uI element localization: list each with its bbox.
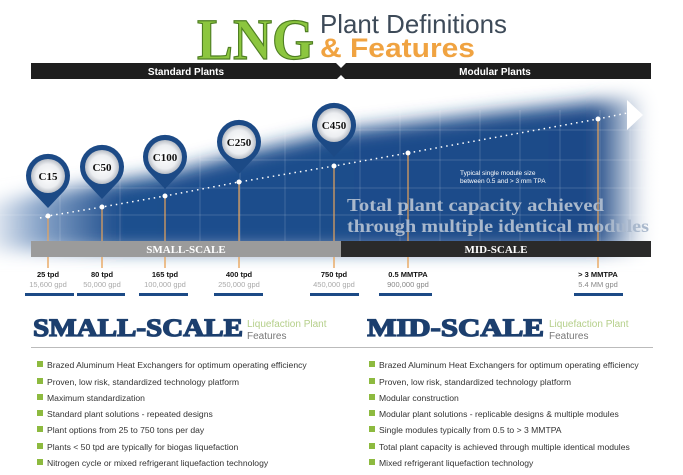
capacity labels: 450,000 gpd xyxy=(313,280,355,289)
heading: mid-scale: Liquefaction Plant xyxy=(549,319,629,330)
list: mid-scale features: Modular plant solutions - replicable designs & multiple modules xyxy=(379,409,619,419)
list: small-scale features: Brazed Aluminum Heat Exchangers for optimum operating efficiency xyxy=(47,360,307,370)
black header bar: Modular Plants xyxy=(459,67,531,78)
capacity labels: 0.5 MMTPA xyxy=(388,270,428,279)
infographic graphic xyxy=(0,7,651,296)
list: mid-scale features: Mixed refrigerant liquefaction technology xyxy=(379,458,533,468)
capacity labels: > 3 MMTPA xyxy=(578,270,618,279)
pins: C250 xyxy=(227,137,252,149)
scale bars: MID-SCALE xyxy=(465,244,527,256)
capacity labels xyxy=(29,270,618,289)
list: mid-scale features: Proven, low risk, standardized technology platform xyxy=(379,377,571,387)
heading: mid-scale: MID-SCALE xyxy=(367,315,544,342)
pins: C15 xyxy=(39,171,58,183)
list: mid-scale features: Total plant capacity is achieved through multiple identical modules xyxy=(379,442,630,452)
heading: mid-scale: Features xyxy=(549,331,588,342)
infographic graphic: Total plant capacity achieved xyxy=(347,195,604,215)
heading: small-scale: Liquefaction Plant xyxy=(247,319,327,330)
capacity labels: 50,000 gpd xyxy=(83,280,121,289)
dotted trend line xyxy=(40,113,627,218)
infographic graphic: through multiple identical modules xyxy=(347,216,649,236)
list: mid-scale features xyxy=(369,360,639,468)
pins: C450 xyxy=(322,120,347,132)
list: small-scale features: Nitrogen cycle or mixed refrigerant liquefaction technology xyxy=(47,458,268,468)
capacity labels: 25 tpd xyxy=(37,270,59,279)
list: mid-scale features: Modular construction xyxy=(379,393,459,403)
list: mid-scale features: Single modules typically from 0.5 to > 3 MMTPA xyxy=(379,425,562,435)
list: small-scale features: Plant options from 25 to 750 tons per day xyxy=(47,425,204,435)
title: LNG: LNG xyxy=(197,7,314,72)
list: small-scale features: Plants < 50 tpd are typically for biogas liquefaction xyxy=(47,442,238,452)
capacity labels: 15,600 gpd xyxy=(29,280,67,289)
pins: C50 xyxy=(93,162,112,174)
black header bar xyxy=(31,63,651,79)
list: mid-scale features: Brazed Aluminum Heat Exchangers for optimum operating efficiency xyxy=(379,360,639,370)
heading: small-scale: Features xyxy=(247,331,286,342)
scale bars xyxy=(31,241,651,257)
capacity labels: 100,000 gpd xyxy=(144,280,186,289)
black header bar: Standard Plants xyxy=(148,67,224,78)
capacity labels: 400 tpd xyxy=(226,270,253,279)
heading: mid-scale xyxy=(367,315,629,342)
blue capacity area xyxy=(0,97,665,250)
pins xyxy=(26,103,356,208)
infographic graphic: between 0.5 and > 3 mm TPA xyxy=(460,178,546,185)
capacity labels: 80 tpd xyxy=(91,270,113,279)
capacity labels: 165 tpd xyxy=(152,270,179,279)
module text: Typical single module size xyxy=(460,170,536,177)
title: & Features: & Features xyxy=(320,33,475,63)
arrow head xyxy=(627,100,643,130)
capacity labels: 750 tpd xyxy=(321,270,348,279)
capacity labels: 900,000 gpd xyxy=(387,280,429,289)
capacity labels: 5.4 MM gpd xyxy=(578,280,618,289)
list: small-scale features: Proven, low risk, standardized technology platform xyxy=(47,377,239,387)
list: small-scale features: Standard plant solutions - repeated designs xyxy=(47,409,213,419)
pins: C100 xyxy=(153,152,178,164)
capacity labels: 250,000 gpd xyxy=(218,280,260,289)
heading: small-scale xyxy=(33,315,327,342)
title: Plant Definitions: Plant Definitions xyxy=(320,9,507,39)
scale bars: SMALL-SCALE xyxy=(146,244,226,256)
list: small-scale features: Maximum standardization xyxy=(47,393,145,403)
heading: small-scale: SMALL-SCALE xyxy=(33,315,243,342)
vertical orange lines xyxy=(48,119,598,268)
list: small-scale features xyxy=(37,360,307,468)
